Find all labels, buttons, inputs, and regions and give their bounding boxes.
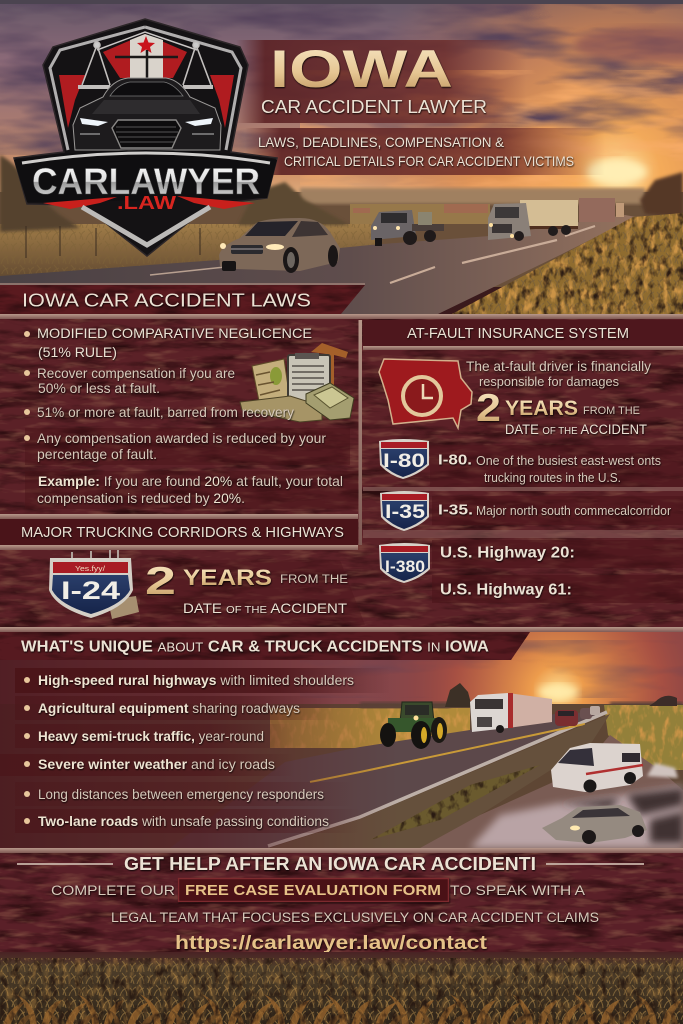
bullet list: unique hazards: Severe winter weather and icy roads	[38, 757, 275, 772]
icon: I-24 shield calendar: Yes.fyy/	[75, 566, 105, 573]
deadline: 2 years from the date of the accident (right)	[476, 387, 647, 437]
deadline: 2 years from the date of the accident (left)	[145, 560, 348, 616]
deadline: 2 years from the date of the accident (right): FROM THE	[583, 405, 640, 417]
deadline: 2 years from the date of the accident (left): 2	[145, 560, 176, 603]
logo wordmark: CARLAWYER	[32, 161, 260, 202]
panel heading: Iowa car accident laws: IOWA CAR ACCIDENT LAWS	[22, 290, 311, 310]
title banner	[236, 40, 605, 175]
background: sunset sky	[0, 0, 683, 205]
panel heading: what's unique: WHAT'S UNIQUE ABOUT CAR & TRUCK ACCIDENTS IN IOWA	[21, 638, 489, 656]
text: U.S. Highway 20: U.S. Highway 20:	[440, 544, 575, 562]
title: IOWA: IOWA	[270, 40, 453, 99]
text: I-80 description: One of the busiest east-west onts	[476, 454, 661, 468]
flatbed tow truck	[371, 210, 444, 246]
deadline: 2 years from the date of the accident (right): YEARS	[505, 397, 578, 420]
bullet list: unique hazards: Two-lane roads with unsafe passing conditions	[38, 814, 329, 829]
subtitle: car accident lawyer: CAR ACCIDENT LAWYER	[261, 97, 487, 117]
icon: I-24 shield calendar	[49, 550, 139, 619]
text: modified comparative negligence: compensation is reduced by 20%.	[37, 490, 245, 506]
text: I-80 description: trucking routes in the U.S.	[484, 471, 621, 485]
semi truck with trailers on highway	[488, 198, 624, 241]
call to action text line 2: LEGAL TEAM THAT FOCUSES EXCLUSIVELY ON CAR ACCIDENT CLAIMS	[111, 910, 599, 925]
bullet bands	[0, 668, 390, 833]
text: modified comparative negligence	[37, 325, 343, 506]
text: modified comparative negligence: Any compensation awarded is reduced by your	[37, 430, 326, 446]
text: at-fault driver: responsible for damages	[479, 374, 619, 389]
deadline: 2 years from the date of the accident (left): FROM THE	[280, 574, 348, 586]
text: U.S. Highway 61: U.S. Highway 61:	[440, 582, 572, 598]
landscape: horizon, field, road and corn	[0, 155, 683, 314]
vehicle: green tractor	[380, 702, 447, 749]
vehicles: cars on distant road	[555, 706, 600, 726]
icon: I-380 highway shield: I-380	[385, 557, 425, 576]
text: modified comparative negligence: Example: If you are found 20% at fault, your total	[38, 473, 343, 489]
bullets	[24, 331, 30, 441]
panel heading: Iowa car accident laws	[0, 284, 365, 314]
button: free case evaluation form: FREE CASE EVALUATION FORM	[185, 882, 441, 899]
deadline: 2 years from the date of the accident (right): 2	[476, 387, 501, 430]
text: I-80 description	[438, 452, 661, 485]
icon: I-35 highway shield	[380, 491, 429, 531]
bullet list: comparative negligence	[24, 325, 343, 506]
icon: scales of justice	[78, 42, 213, 87]
panel: call to action background	[0, 848, 683, 958]
text: at-fault driver: The at-fault driver is financially	[466, 358, 651, 374]
tagline: LAWS, DEADLINES, COMPENSATION &	[258, 134, 505, 150]
text: modified comparative negligence: 50% or less at fault.	[38, 380, 160, 396]
text: modified comparative negligence: MODIFIED COMPARATIVE NEGLICENCE	[37, 325, 312, 341]
bullet list: unique hazards: Agricultural equipment sharing roadways	[38, 701, 300, 716]
scene: rural highway at sunset	[0, 632, 683, 848]
text: I-35 description: I-35.	[438, 502, 473, 518]
banner	[14, 150, 277, 202]
text: modified comparative negligence: (51% RULE)	[38, 344, 117, 360]
panel heading: what's unique	[0, 632, 530, 660]
cornfield footer	[0, 952, 683, 1024]
bullet list: unique hazards: High-speed rural highways with limited shoulders	[38, 673, 354, 688]
call to action text line 1	[51, 878, 585, 902]
text: I-35 description: Major north south commecalcorridor	[476, 504, 671, 518]
text: I-80 description: I-80.	[438, 452, 472, 468]
text: modified comparative negligence: percentage of fault.	[37, 446, 157, 462]
text: modified comparative negligence: Recover compensation if you are	[37, 365, 235, 381]
bullet list: unique hazards: Heavy semi-truck traffic, year-round	[38, 729, 264, 744]
button: free case evaluation form	[178, 878, 448, 902]
icon: I-380 highway shield	[379, 543, 430, 583]
deadline: 2 years from the date of the accident (left): YEARS	[183, 565, 272, 590]
logo: CarLawyer.law shield	[14, 19, 277, 256]
bullet list: unique hazards	[24, 673, 354, 829]
call to action heading: GET HELP AFTER AN IOWA CAR ACCIDENTI	[124, 854, 536, 874]
text: at-fault driver	[466, 358, 651, 389]
icon: I-80 highway shield: I-80	[383, 451, 425, 472]
text: I-35 description	[438, 502, 671, 518]
logo domain: .LAW	[117, 193, 176, 213]
contact URL: https://carlawyer.law/contact	[175, 933, 488, 954]
vehicle: red semi truck	[470, 693, 552, 733]
vehicle: silver car in snow	[542, 805, 647, 844]
icon: Iowa map with clock	[379, 359, 472, 428]
icon: red star	[137, 36, 155, 53]
panel heading: at-fault insurance system: AT-FAULT INSURANCE SYSTEM	[407, 326, 629, 342]
icon: I-24 shield calendar: I-24	[61, 577, 120, 605]
tagline: CRITICAL DETAILS FOR CAR ACCIDENT VICTIMS	[284, 153, 574, 169]
icon: I-80 highway shield	[379, 439, 429, 479]
tagline	[258, 134, 574, 169]
car on the road	[219, 218, 340, 273]
call to action text line 1: COMPLETE OUR	[51, 883, 175, 898]
deadline: 2 years from the date of the accident (left): DATE OF THE ACCIDENT	[183, 600, 347, 616]
call to action text line 1: TO SPEAK WITH A	[450, 883, 585, 898]
panel: laws, highways background	[0, 314, 683, 632]
deadline: 2 years from the date of the accident (right): DATE OF THE ACCIDENT	[505, 422, 647, 437]
panel heading: major trucking corridors: MAJOR TRUCKING CORRIDORS & HIGHWAYS	[21, 525, 344, 541]
bullet list: unique hazards: Long distances between emergency responders	[38, 787, 324, 802]
text: modified comparative negligence: 51% or more at fault, barred from recovery	[37, 404, 294, 420]
icon: legal documents, gavel and cash	[240, 343, 354, 422]
vehicle: ambulance	[551, 743, 643, 792]
icon: black car front	[73, 78, 221, 150]
icon: I-35 highway shield: I-35	[385, 502, 426, 523]
